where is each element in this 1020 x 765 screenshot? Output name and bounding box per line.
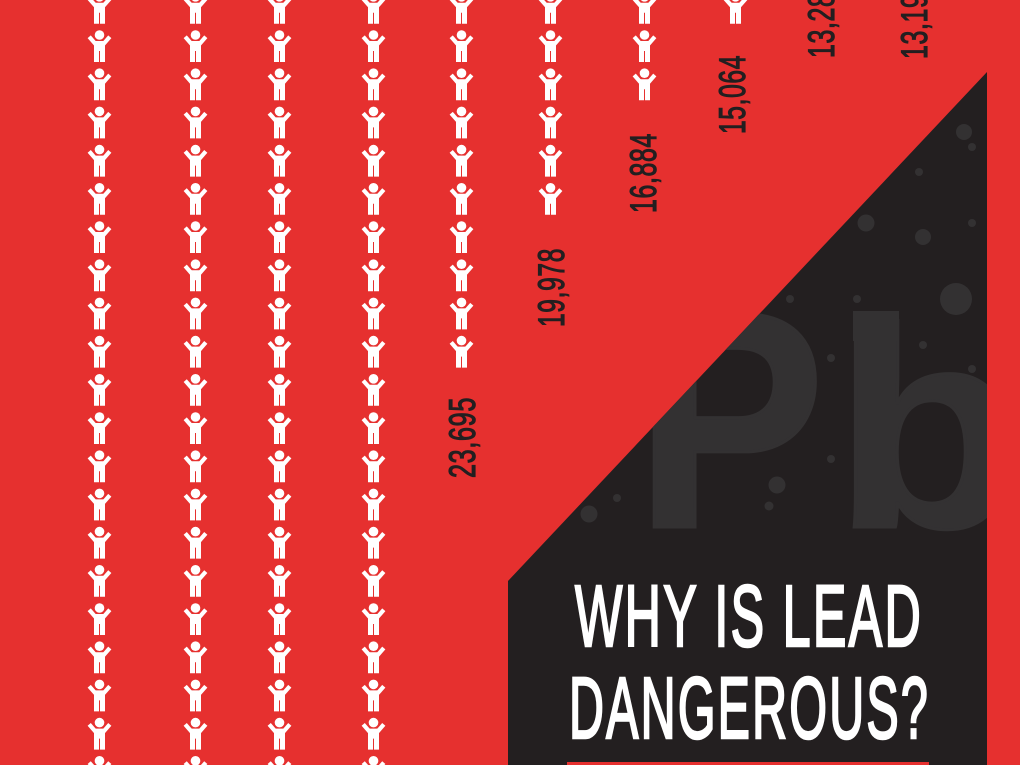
pictogram column 3 xyxy=(269,0,290,765)
panel background xyxy=(508,72,987,765)
pictogram column 5 xyxy=(451,0,472,368)
lead symbol Pb xyxy=(652,311,987,531)
title xyxy=(569,568,930,757)
pictogram column 4 xyxy=(363,0,384,765)
lead symbol Pb: b xyxy=(834,269,1020,588)
value label 16,884: 16,884 xyxy=(623,133,664,213)
pictogram column 6 xyxy=(540,0,561,215)
panel: why is lead dangerous xyxy=(508,72,1020,765)
red divider xyxy=(567,762,929,765)
lead symbol Pb: P xyxy=(635,247,825,594)
value label 15,064: 15,064 xyxy=(712,55,753,134)
pictogram column 1 xyxy=(89,0,110,765)
lead particles xyxy=(580,124,976,522)
pictogram column 2 xyxy=(185,0,206,765)
value label 19,978: 19,978 xyxy=(531,248,572,327)
pictogram column 7 xyxy=(634,0,655,100)
pictogram column 8 xyxy=(725,0,746,24)
value label 23,695: 23,695 xyxy=(442,397,483,478)
